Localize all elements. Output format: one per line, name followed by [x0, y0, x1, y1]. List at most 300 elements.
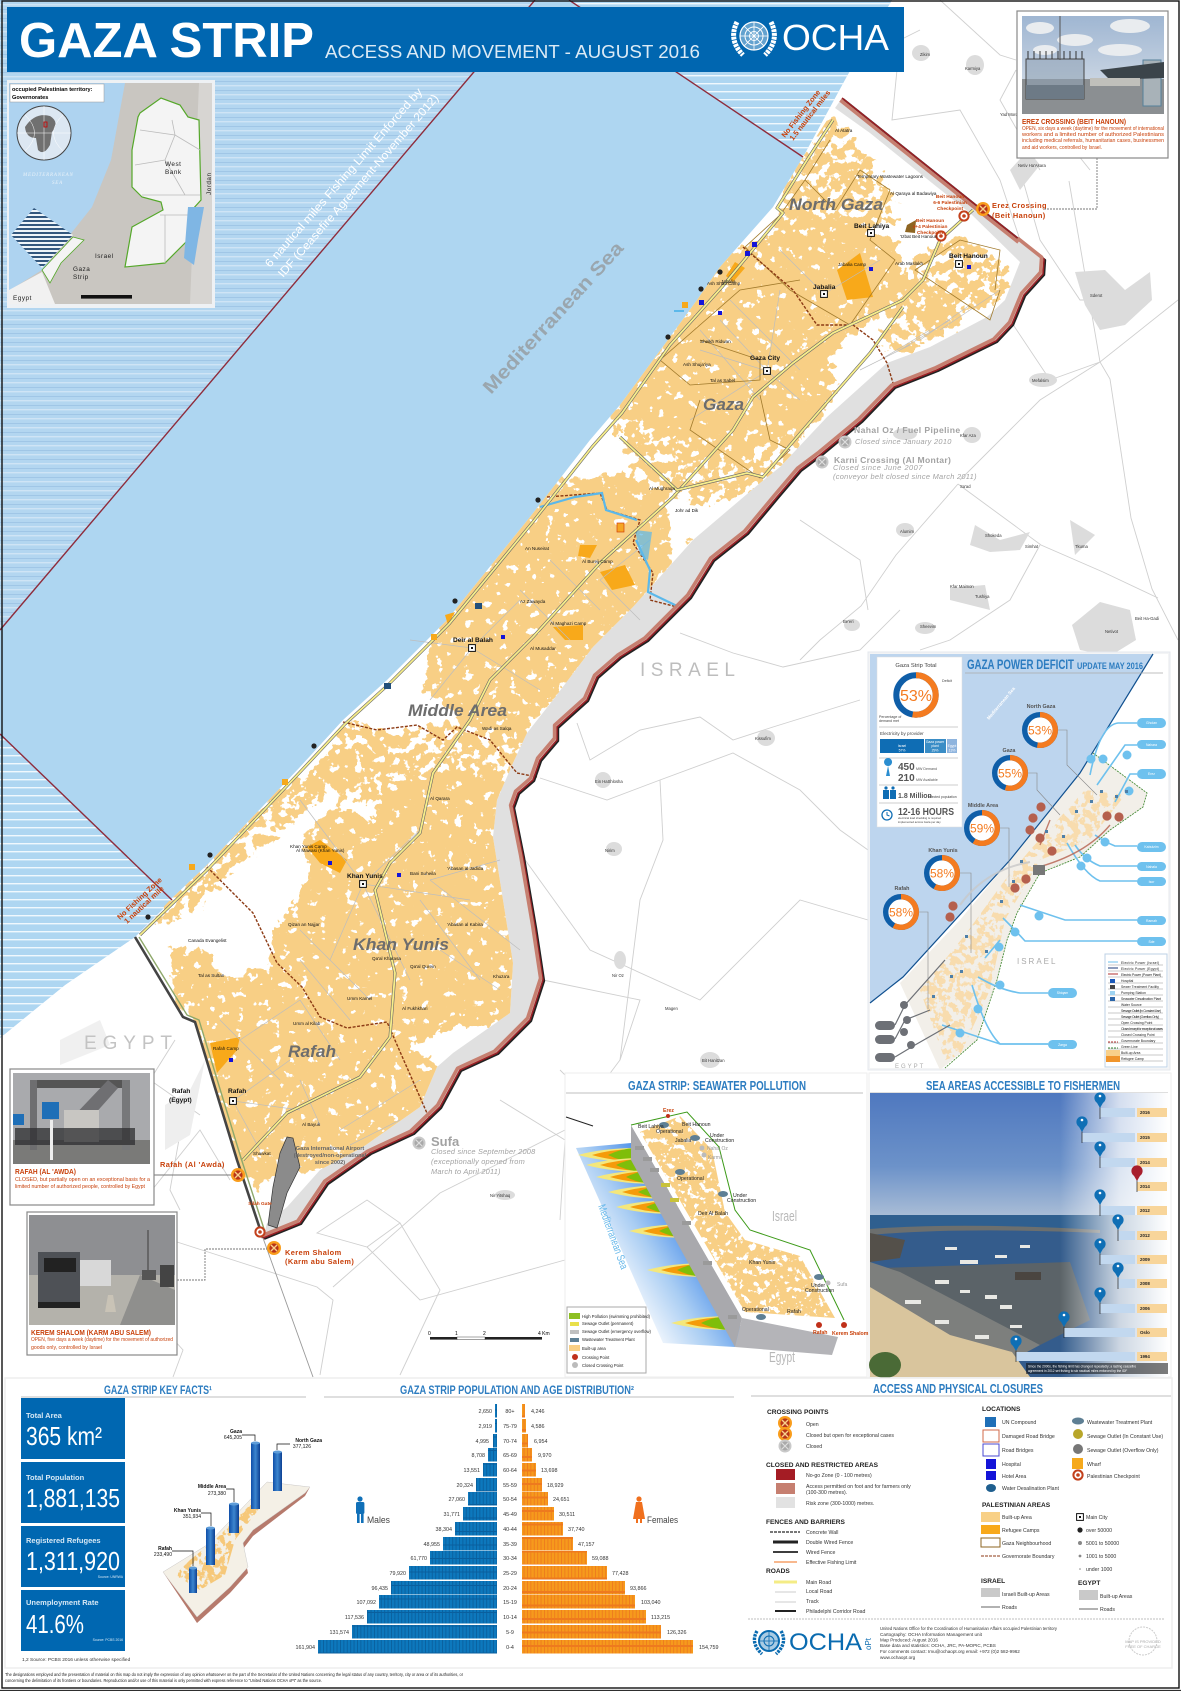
summary card: Deficit: [942, 679, 952, 683]
israeli locality labels: Shokeda: [985, 533, 1002, 538]
age labels: [503, 1409, 517, 1651]
population pyramid: Males: [367, 1515, 390, 1525]
egypt: [9, 272, 55, 304]
small locality labels: [188, 128, 938, 1156]
photo note text: agreement in 2012 set fishing to six nautical miles enforced by the IDF: [1028, 1369, 1127, 1373]
seawater labels: Under: [710, 1133, 724, 1139]
map points: [932, 790, 1128, 998]
sand beach: [870, 1287, 1030, 1377]
legend: palestinian areas: Main City: [1086, 1515, 1108, 1521]
female values: 77,428: [612, 1571, 628, 1577]
provider bars: 57%: [899, 748, 905, 752]
open crossing labels: [160, 201, 1047, 1266]
sea and country names: EGYPT: [84, 1033, 172, 1054]
legend: egypt: Roads: [1100, 1607, 1115, 1613]
legend: palestinian areas: PALESTINIAN AREAS: [982, 1502, 1051, 1509]
closed crossing labels: Nahal Oz / Fuel Pipeline: [854, 425, 961, 435]
year labels: 1994: [1140, 1354, 1150, 1359]
male values: 27,060: [448, 1497, 465, 1503]
neighbourhood boundaries: [660, 140, 1000, 478]
column labels: Khan Yunis: [174, 1508, 201, 1514]
treatment plants: [659, 1122, 824, 1320]
israeli locality labels: Nir Yitshaq: [490, 1193, 511, 1198]
male values: 79,920: [390, 1571, 406, 1577]
small locality labels: Qizan an Najjar: [288, 922, 320, 927]
sea and country names: [84, 238, 735, 1054]
demand figures: 210: [898, 773, 915, 784]
power map legend: Built-up Area: [1121, 1051, 1141, 1055]
checkpoint labels: 4+4 Palestinian: [913, 224, 947, 230]
inset labels: Strip: [73, 274, 89, 281]
sea: [0, 0, 892, 1038]
male values: 13,551: [464, 1468, 480, 1474]
middle area donut: 59%: [970, 822, 994, 836]
legend: locations: Hotel Area: [1002, 1474, 1026, 1480]
pill labels: Nahara: [1146, 743, 1157, 747]
seawater red labels: Kerem Shalom: [832, 1331, 869, 1337]
harbour shallow water: [880, 1262, 1090, 1345]
year labels: 2014: [1140, 1160, 1150, 1165]
small locality labels: Ash Shati Camp: [707, 281, 741, 286]
female values: 93,866: [630, 1586, 646, 1592]
key fact: refugees: [21, 1526, 125, 1587]
dead sea: [184, 207, 204, 265]
female values: 47,157: [578, 1542, 594, 1548]
open crossing labels: Kerem Shalom: [285, 1248, 342, 1257]
vegetation: [869, 1352, 901, 1378]
year labels: 2014: [1140, 1184, 1150, 1189]
photo: [13, 1073, 150, 1164]
caption: KEREM SHALOM (KARM ABU SALEM): [31, 1328, 152, 1337]
donut leaders: [919, 730, 1097, 1009]
donut names: Middle Area: [968, 803, 999, 809]
khan yunis donut: [927, 858, 957, 888]
summary card: [877, 657, 962, 827]
grey egypt pills: [875, 1021, 895, 1062]
scale bar: [428, 1331, 550, 1340]
legend: palestinian areas: 1001 to 5000: [1086, 1554, 1116, 1560]
west bank governorates: [125, 98, 201, 267]
timeline bars: [1016, 1108, 1135, 1361]
inset scale bar: [81, 295, 132, 299]
key fact: unemployment: 41.6%: [26, 1609, 84, 1639]
legend: palestinian areas: over 50000: [1086, 1528, 1112, 1534]
summary card: 1.8 Million: [898, 793, 932, 800]
legend: locations: Hospital: [1002, 1462, 1021, 1468]
provider bars: Israel: [898, 744, 906, 748]
legend: fences: Concrete Wall: [806, 1530, 838, 1536]
small locality labels: Rafah Camp: [213, 1046, 239, 1051]
legend: fences: Wired Fence: [806, 1550, 836, 1556]
small locality labels: Wadi as Salqa: [482, 726, 512, 731]
fade to white: [1060, 1093, 1168, 1377]
israeli locality labels: Karmiya: [965, 66, 981, 71]
fishing limit text: IDF (Ceasefire Agreement-November 2012): [276, 92, 442, 280]
power plant lines: [960, 820, 1110, 905]
panel: seawater pollution: [565, 1073, 869, 1377]
legend: israel: ISRAEL: [981, 1578, 1005, 1585]
disclaimer: [5, 1672, 463, 1683]
credits: [880, 1626, 1058, 1660]
checkpoint labels: Silah Gate: [248, 1201, 272, 1207]
photo note text: Since the 2000s, the fishing limit has changed repeatedly; a lasting ceasefire: [1028, 1364, 1136, 1368]
legend: palestinian areas: Built-up Area: [1002, 1515, 1032, 1521]
legend: roads: Main Road: [806, 1580, 831, 1586]
panel: gaza power deficit: [868, 652, 1170, 1070]
legend: roads: Track: [806, 1599, 819, 1605]
open crossings: [666, 1114, 847, 1328]
israeli locality labels: Mefalsim: [1032, 378, 1049, 383]
country labels: Egypt: [769, 1349, 796, 1366]
column labels: 377,126: [293, 1444, 311, 1450]
year labels: Oslo: [1140, 1330, 1150, 1335]
male values: 131,574: [330, 1630, 349, 1636]
no fishing zone labels: [115, 88, 832, 925]
egypt number circles: [900, 1001, 915, 1049]
closed crossing labels: Closed since January 2010: [855, 437, 952, 446]
power map legend: Open Crossing Point: [1121, 1021, 1152, 1025]
airport label: since 2002): [315, 1160, 345, 1166]
photo: Rafah crossing: [10, 1069, 154, 1205]
blue feeder pills: [1048, 718, 1166, 1049]
airport label: Gaza International Airport: [296, 1146, 364, 1152]
power map legend: Governorate Boundary: [1121, 1039, 1156, 1043]
provider bars: Egypt: [948, 744, 956, 748]
photo: [1022, 16, 1164, 114]
power map country labels: [895, 957, 1057, 1070]
inset labels: Jordan: [206, 172, 213, 195]
donut names: North Gaza: [1027, 704, 1056, 710]
male figure: [356, 1496, 364, 1523]
small locality labels: 'Abasan al Jadida: [447, 866, 484, 871]
seawater red labels: Rafah: [813, 1330, 827, 1336]
power map legend: Hospital: [1121, 979, 1133, 983]
age labels: 60-64: [503, 1468, 517, 1474]
risk zone grey band: [263, 98, 1044, 1238]
isometric population map: [154, 1429, 322, 1623]
age labels: 80+: [505, 1409, 515, 1415]
small locality labels: Al Bureij Camp: [582, 559, 613, 564]
seawater labels: Khan Yunis: [749, 1260, 776, 1266]
seawater labels: Beit Hanoun: [682, 1122, 711, 1128]
main city labels: Beit Hanoun: [949, 253, 988, 260]
seawater labels: [638, 1122, 834, 1315]
small locality labels: Tal as Sultan: [198, 973, 225, 978]
panel heading: GAZA STRIP: SEAWATER POLLUTION: [628, 1079, 806, 1093]
male values: 96,435: [372, 1586, 388, 1592]
legend: palestinian areas: Refugee Camps: [1002, 1528, 1040, 1534]
legend: crossing points: Closed but open for exceptional cases: [806, 1433, 894, 1439]
caption: EREZ CROSSING (BEIT HANOUN): [1022, 117, 1126, 126]
year labels: 2008: [1140, 1281, 1150, 1286]
closed crossing labels: Closed since June 2007: [833, 463, 923, 472]
main city labels: Rafah: [228, 1088, 246, 1095]
year boxes: [1137, 1108, 1167, 1361]
photo: Rafah crossing: limited number of authorized people, controlled by Egypt: [15, 1184, 146, 1190]
male values: 61,770: [410, 1556, 427, 1562]
source note: 1,2 Source: PCBS 2016 unless otherwise specified: [22, 1657, 131, 1663]
legend: fences: FENCES AND BARRIERS: [766, 1519, 845, 1526]
israeli locality labels: Sa'ad: [960, 484, 971, 489]
small locality labels: Al Musaddar: [530, 646, 556, 651]
seawater labels: Construction: [727, 1198, 756, 1204]
power map legend: Closed Crossing Point: [1121, 1033, 1155, 1037]
seawater labels: Operational: [677, 1176, 704, 1182]
inset sea label: [22, 173, 74, 186]
key fact: unemployment: Source: PCBS 2016: [93, 1638, 123, 1642]
seawater labels: Beit Lahiya: [638, 1124, 664, 1130]
wadi wetland: [635, 530, 652, 560]
female figure: [633, 1496, 645, 1523]
column labels: Middle Area: [198, 1484, 226, 1490]
green border: [945, 753, 1147, 1068]
israeli locality labels: Sderot: [1090, 293, 1103, 298]
power map legend: Sewage Outlet (Overflow Only): [1121, 1015, 1159, 1019]
header banner: [7, 7, 904, 72]
credits: Base data and statistics: OCHA, JRC, PA-MOPIC, PCBS: [880, 1643, 996, 1648]
no fishing zone labels: No Fishing Zone: [779, 88, 822, 139]
globe: [17, 106, 71, 160]
pill labels: [1057, 721, 1159, 1047]
small locality labels: Bani Suheila: [410, 871, 436, 876]
legend: restricted areas: [766, 1462, 911, 1508]
gaza donut: [995, 758, 1025, 788]
pill labels: Ramah: [1146, 919, 1157, 923]
wharves and hospitals markers: [145, 220, 971, 1062]
seawater labels: Under: [811, 1283, 825, 1289]
governorate lines: [135, 120, 200, 263]
legend: locations: Water Desalination Plant: [1002, 1486, 1059, 1492]
outfall pipes: [635, 1146, 737, 1319]
legend: roads: [766, 1568, 866, 1615]
khan yunis donut: 58%: [930, 866, 954, 880]
summary card: electrical load shedding is required: [898, 816, 942, 820]
ocha wordmark: OCHA: [782, 17, 889, 58]
summary card: Percentage of: [879, 715, 901, 719]
strip: [900, 753, 1147, 1070]
pill labels: Gholan: [1146, 721, 1157, 725]
green border: [631, 1112, 844, 1320]
inset: occupied Palestinian territory: Governorates: [12, 95, 48, 101]
age labels: 35-39: [503, 1542, 517, 1548]
israeli locality labels: Kissufim: [755, 736, 771, 741]
governorate names: North Gaza: [789, 195, 883, 214]
male values: 38,304: [436, 1527, 452, 1533]
seawater legend: Crossing Point: [582, 1355, 610, 1360]
small locality labels: Temporary Wastewater Lagoons: [857, 174, 924, 179]
power map legend: Pumping Station: [1121, 991, 1146, 995]
main city labels: Deir al Balah: [453, 637, 493, 644]
credits: Map Produced: August 2016: [880, 1638, 938, 1642]
local road grid: [220, 250, 1000, 1150]
photo: Erez crossing: [1017, 11, 1168, 158]
israeli locality labels: Tkuma: [1075, 544, 1088, 549]
donut names: Rafah: [895, 886, 909, 892]
legend: roads: Local Road: [806, 1589, 832, 1595]
legend: restricted areas: CLOSED AND RESTRICTED AREAS: [766, 1462, 879, 1469]
column labels: Gaza: [230, 1429, 242, 1435]
photo: Erez crossing: workers and a limited number of authorized Palestinians: [1022, 132, 1165, 138]
age labels: 45-49: [503, 1512, 517, 1518]
age labels: 20-24: [503, 1586, 517, 1592]
clock icon: [882, 810, 892, 820]
female values: 30,511: [559, 1512, 575, 1518]
country labels: [769, 1208, 797, 1366]
inset sea label: SEA: [52, 181, 63, 186]
credits: United Nations Office for the Coordination of Humanitarian Affairs occupied Palestinian territory: [880, 1626, 1058, 1631]
pill labels: Nahala: [1146, 865, 1157, 869]
male values: 31,771: [444, 1512, 460, 1518]
free of charge stamp: FREE OF CHARGE: [1125, 1644, 1161, 1649]
closed crossing labels: (exceptionally opened from: [431, 1157, 525, 1166]
legend: crossing points: CROSSING POINTS: [767, 1409, 829, 1416]
power map country labels: ISRAEL: [1017, 957, 1057, 966]
small locality labels: Al Fukhkhari: [402, 1006, 428, 1011]
year labels: 2015: [1140, 1135, 1150, 1140]
power map legend: Electric Power (Israel): [1121, 961, 1159, 965]
main city labels: [169, 223, 988, 1104]
photo: Kerem Shalom crossing: goods only, controlled by Israel: [31, 1345, 102, 1351]
key fact: unemployment: [21, 1590, 125, 1651]
israeli locality labels: Simhat: [1025, 544, 1039, 549]
small locality labels: Qa'al Qurein: [410, 964, 436, 969]
inset: occupied Palestinian territory: [7, 80, 215, 308]
panel: sea areas accessible to fishermen: [869, 1073, 1171, 1378]
israeli locality labels: Nir Oz: [612, 973, 624, 978]
photo: Erez crossing: and aid workers, controlled by Israel.: [1022, 145, 1102, 151]
main title: GAZA STRIP: [19, 14, 314, 68]
small locality labels: Khan Yunis Camp: [290, 844, 327, 849]
demand figures: 450: [898, 762, 915, 773]
small locality labels: An Nuseirat: [525, 546, 550, 551]
legend: palestinian areas: [981, 1502, 1119, 1573]
free of charge stamp: MAP IS PROVIDED: [1125, 1639, 1161, 1644]
pill labels: Kabutzim: [1144, 845, 1159, 849]
seawater legend: Built-up area: [582, 1346, 606, 1351]
north gaza donut: [1025, 715, 1055, 745]
middle area donut: [967, 813, 997, 843]
pill labels: Shiqam: [1057, 991, 1068, 995]
footer ocha logo: oPt: [864, 1637, 873, 1650]
inset labels: West: [165, 161, 181, 168]
male bars: [318, 1404, 497, 1654]
age labels: 25-29: [503, 1571, 517, 1577]
crossing markers: [231, 202, 990, 1255]
disclaimer: concerning the delimitation of its frontiers or boundaries. Reproduction and/or use of this material is only permitted with express reference to "United Nations OCHA oPt" as the source.: [5, 1678, 322, 1683]
built up in power map: [920, 790, 1125, 1060]
israeli locality labels: Beit Ha-Gadi: [1135, 616, 1159, 621]
open crossing labels: (Beit Hanoun): [992, 211, 1046, 220]
pill labels: Zarga: [1058, 1043, 1067, 1047]
column labels: 233,490: [154, 1552, 172, 1558]
seawater legend: Closed Crossing Point: [582, 1363, 624, 1368]
age labels: 70-74: [503, 1439, 517, 1445]
age labels: 40-44: [503, 1527, 517, 1533]
power map legend: Water Source: [1121, 1003, 1142, 1007]
photo: Kerem Shalom crossing: OPEN, five days a week (daytime) for the movement of authorized: [31, 1337, 173, 1343]
photo note text: [1028, 1364, 1136, 1373]
key fact: total population: [21, 1462, 125, 1523]
column leaders: [172, 1435, 290, 1566]
small locality labels: Al Qaraya al Badawiya: [890, 191, 937, 196]
inset labels: [13, 161, 213, 302]
male values: 107,092: [356, 1600, 376, 1606]
legend: locations: [982, 1406, 1163, 1492]
key fact: refugees: Registered Refugees: [26, 1536, 101, 1545]
land white: [870, 654, 1168, 1068]
seawater grey labels: [707, 1146, 848, 1288]
feeder lines: [942, 723, 1137, 1044]
israeli locality labels: Magen: [665, 1006, 678, 1011]
seawater labels: Deir Al Balah: [698, 1211, 728, 1217]
seawater red labels: [663, 1108, 869, 1337]
legend: egypt: Built-up Areas: [1100, 1594, 1133, 1600]
small locality labels: Jabalia Camp: [838, 262, 867, 267]
small locality labels: Arab Maslakh: [895, 261, 924, 266]
male values: 4,995: [476, 1439, 489, 1445]
legend: palestinian areas: under 1000: [1086, 1567, 1112, 1573]
credits: For comments contact: Imu@ochaopt.org email: +972 (0)2 582-9962: [880, 1649, 1020, 1654]
female values: 154,759: [699, 1645, 718, 1651]
photo: Rafah crossing: CLOSED, but partially open on an exceptional basis for a: [15, 1177, 150, 1183]
scale bar: 2: [483, 1331, 486, 1337]
donut names: [895, 704, 1056, 892]
land relief: [10, 83, 212, 304]
egypt border fence: [135, 937, 265, 1238]
israeli locality labels: Bit Hanitzan: [702, 1058, 725, 1063]
year labels: 2016: [1140, 1110, 1150, 1115]
column labels: [154, 1429, 322, 1558]
population pyramid: [296, 1404, 718, 1654]
legend: fences: Double Wired Fence: [806, 1540, 853, 1546]
israeli locality labels: [490, 52, 1159, 1198]
photo: Erez crossing: including medical referrals, humanitarian cases, businessmen: [1022, 138, 1164, 144]
power map legend: Refugee Camp: [1121, 1057, 1144, 1061]
seawater red labels: Erez: [663, 1108, 674, 1114]
pill labels: Isor: [1149, 880, 1155, 884]
population heading: GAZA STRIP POPULATION AND AGE DISTRIBUTION²: [400, 1385, 634, 1397]
legend: locations: LOCATIONS: [982, 1406, 1021, 1413]
key facts heading: GAZA STRIP KEY FACTS¹: [104, 1385, 212, 1397]
inset labels: Gaza: [73, 266, 90, 273]
israeli locality labels: Netiv Ha'Asara: [1018, 163, 1046, 168]
legend: locations: Palestinian Checkpoint: [1087, 1474, 1140, 1480]
small locality labels: Al Mawasi (Khan Yunis): [296, 848, 345, 853]
key fact: refugees: 1,311,920: [26, 1546, 120, 1576]
seawater legend: High Pollution (swimming prohibited): [582, 1314, 651, 1319]
inset: occupied Palestinian territory: occupied Palestinian territory:: [12, 87, 93, 93]
closed crossing labels: March to April 2011): [431, 1167, 501, 1176]
age labels: 5-9: [506, 1630, 514, 1636]
inset labels: Egypt: [13, 295, 32, 302]
small locality labels: Canada Evangelist: [188, 938, 227, 943]
legend: restricted areas: No-go Zone (0 - 100 metres): [806, 1473, 872, 1479]
donut names: Khan Yunis: [928, 848, 958, 854]
age labels: 30-34: [503, 1556, 517, 1562]
footer ocha logo: OCHA: [789, 1629, 862, 1656]
gaza eastern perimeter: [261, 98, 1045, 1239]
key fact: refugees: Source: UNRWA: [98, 1575, 124, 1579]
governorate names: Middle Area: [408, 701, 507, 720]
key fact: total population: Total Population: [26, 1473, 85, 1482]
small locality labels: Jabalia: [721, 279, 736, 284]
closed crossing labels: Sufa: [431, 1134, 460, 1149]
panel: bottom section: [5, 1378, 1172, 1668]
israeli locality labels: Kfar Maimon: [950, 584, 974, 589]
boats: [905, 1245, 1030, 1339]
shore rocks and boats: [870, 1262, 1040, 1360]
power map legend: Sewage Outlet (In Constant Use): [1121, 1009, 1161, 1013]
